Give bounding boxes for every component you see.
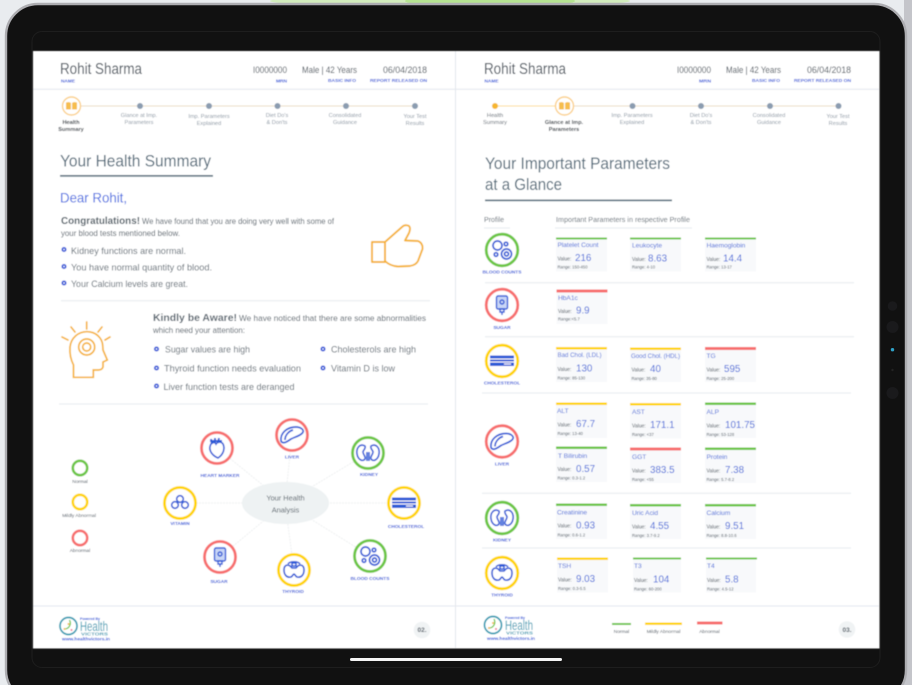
page number 03 (839, 621, 855, 638)
right page header: MRN (699, 78, 712, 84)
logo: health victors: Health (505, 618, 533, 633)
left page progress stepper: Imp. Parameters (188, 114, 230, 120)
table column headers: Profile (484, 217, 504, 224)
profile icon: thyroid (486, 557, 518, 598)
card: bad cholesterol: Value: (558, 367, 571, 373)
right page header: 06/04/2018 (807, 65, 851, 75)
card: alp: Range: 53-128 (706, 432, 735, 437)
card: ggt (630, 448, 681, 483)
card: platelet count (556, 238, 607, 272)
card: t bilirubin: 0.57 (576, 464, 595, 475)
profile icon: cholesterol (484, 345, 520, 386)
right page progress stepper: Health (487, 113, 503, 119)
row: sugar (486, 289, 608, 331)
card: good cholesterol: Range: 35-80 (632, 376, 658, 381)
card: leukocyte: Range: 4-10 (632, 264, 656, 270)
status legend: Abnormal (70, 548, 90, 554)
card: t bilirubin: Range: 0.3-1.2 (558, 476, 586, 480)
card: tg (705, 347, 756, 382)
card: hba1c: Value: (558, 309, 572, 315)
card: hba1c: Range:<5.7 (558, 316, 580, 322)
table column headers: Important Parameters in respective Profile (556, 217, 690, 224)
card: t bilirubin: T Bilirubin (558, 453, 588, 460)
left page header: BASIC INFO (328, 78, 356, 83)
kindly be aware text block (152, 313, 426, 392)
node: heart marker (201, 432, 240, 479)
left page progress stepper: Consolidated (329, 113, 361, 119)
heading: your important parameters at a glance (485, 154, 672, 201)
right page progress stepper: Guidance (757, 120, 781, 126)
left page header: 06/04/2018 (383, 65, 427, 75)
left page header (33, 61, 455, 89)
row: liver (486, 402, 756, 483)
left page progress stepper: Parameters (125, 120, 154, 126)
card: calcium: Value: (706, 524, 720, 530)
card: creatinine (556, 504, 607, 539)
card: platelet count: Platelet Count (558, 242, 599, 249)
congratulations text block: You have normal quantity of blood. (71, 262, 212, 272)
card: protein: 7.38 (725, 465, 745, 476)
card: leukocyte: Value: (632, 257, 646, 263)
status legend (62, 461, 96, 554)
right page progress stepper: Diet Do's (690, 113, 712, 119)
panel: left page health summary (33, 61, 455, 642)
card: good cholesterol: 40 (650, 364, 661, 375)
logo: health victors: Powered By (80, 617, 101, 621)
tablet camera and sensors (886, 301, 898, 399)
card: alp: 101.75 (725, 420, 756, 431)
card: ggt: Value: (632, 468, 646, 474)
card: uric acid: Range: 3.7-9.2 (632, 533, 660, 538)
card: leukocyte: 8.63 (648, 254, 668, 264)
card: uric acid: 4.55 (650, 521, 670, 532)
card: calcium: Range: 8.8-10.6 (706, 533, 737, 538)
card: creatinine: Value: (558, 524, 571, 530)
node: kidney: KIDNEY (360, 472, 379, 478)
logo: health victors: www.healthvictors.in (486, 636, 535, 641)
card: calcium (705, 504, 756, 539)
card: good cholesterol: Value: (632, 368, 645, 374)
card: t4: Range: 4.5-12 (707, 586, 734, 592)
card: good cholesterol (630, 348, 681, 382)
card: ast: Value: (632, 424, 646, 430)
card: protein (705, 448, 756, 483)
left page progress stepper: Your Test (403, 114, 427, 120)
top green glow behind tablet (270, 0, 630, 7)
card: t3: Value: (634, 578, 648, 584)
left page header: MRN (276, 78, 288, 84)
page number 03: 03. (842, 627, 852, 634)
card: ggt: 383.5 (650, 465, 675, 476)
right page progress stepper: Summary (483, 120, 507, 126)
card color legend: Normal (614, 629, 629, 635)
card: hba1c: HbA1c (558, 295, 578, 302)
card: leukocyte: Leukocyte (632, 242, 662, 250)
card: alt (556, 402, 607, 438)
kindly be aware text block: Thyroid function needs evaluation (164, 362, 301, 374)
logo: health victors: Health (80, 619, 108, 634)
center node (242, 482, 329, 524)
right page footer (456, 606, 879, 641)
card: tg: 595 (724, 364, 741, 375)
logo: health victors: Powered By (505, 616, 526, 620)
card: protein: Protein (706, 454, 728, 461)
node: thyroid: THYROID (282, 589, 304, 595)
card: t3: T3 (634, 563, 642, 570)
card: tsh: TSH (558, 563, 571, 570)
logo: health victors: VICTORS (506, 630, 533, 636)
left page progress stepper: Glance at Imp. (121, 113, 158, 119)
card: t3 (633, 558, 681, 592)
node: sugar (204, 542, 236, 585)
left page progress stepper: Health (62, 120, 80, 126)
congratulations text block: Congratulations! (61, 215, 140, 227)
left page progress stepper: Summary (58, 127, 85, 133)
profile icon: cholesterol: CHOLESTEROL (484, 380, 520, 386)
card: alt: 67.7 (576, 419, 595, 430)
card: bad cholesterol: Bad Chol. (LDL) (558, 352, 602, 359)
profile icon: blood counts (483, 234, 522, 276)
card: tsh: Value: (558, 578, 572, 584)
profile icon: thyroid: THYROID (491, 592, 513, 598)
congratulations text block: Kidney functions are normal. (71, 245, 186, 256)
card: t4: Value: (707, 578, 721, 584)
card: creatinine: 0.93 (576, 520, 596, 532)
card: haemoglobin: Range: 13-17 (706, 264, 733, 270)
card: t bilirubin (556, 446, 607, 482)
logo: health victors: VICTORS (81, 632, 108, 636)
left page header: NAME (61, 78, 75, 84)
left page progress stepper: Results (406, 121, 425, 127)
card: uric acid (630, 504, 681, 539)
congratulations text block (61, 215, 335, 289)
card: tg: TG (706, 353, 716, 360)
left page progress stepper: Diet Do's (266, 113, 288, 119)
card: bad cholesterol (556, 347, 607, 382)
heading: your important parameters at a glance: Your Important Parameters (485, 154, 670, 173)
icon: head with idea rays (62, 322, 110, 377)
kindly be aware text block: Sugar values are high (165, 344, 250, 354)
right page progress stepper: Parameters (549, 127, 579, 133)
node: thyroid (278, 554, 310, 595)
card: uric acid: Uric Acid (632, 510, 658, 517)
greeting: Dear Rohit, (60, 190, 127, 206)
card: tsh: 9.03 (576, 574, 596, 585)
card: uric acid: Value: (632, 524, 646, 530)
card: calcium: Calcium (706, 510, 731, 517)
right page progress stepper: Explained (620, 120, 644, 126)
card: leukocyte (630, 238, 681, 272)
card: hba1c (556, 290, 608, 324)
left page progress stepper: & Don'ts (267, 120, 288, 126)
card: t3: 104 (653, 574, 670, 586)
table column headers (484, 217, 692, 228)
left page progress stepper: Explained (197, 121, 221, 127)
card color legend: Abnormal (699, 629, 720, 635)
right page header: I0000000 (677, 65, 711, 75)
center node: Your Health (266, 494, 305, 502)
card: t3: Range: 60-200 (634, 586, 662, 592)
profile icon: liver: LIVER (495, 462, 510, 468)
profile icon: sugar: SUGAR (493, 325, 511, 331)
left page footer (33, 606, 455, 642)
radial diagram: health analysis (164, 420, 424, 595)
page number 02 (414, 622, 430, 638)
card: alp: Value: (706, 424, 720, 430)
card: calcium: 9.51 (725, 521, 744, 532)
profile icon: blood counts: BLOOD COUNTS (483, 270, 522, 276)
card: platelet count: Range: 150-450 (558, 264, 588, 270)
right page progress stepper: Consolidated (753, 113, 785, 119)
heading: your health summary: Your Health Summary (60, 152, 211, 170)
kindly be aware text block: which need your attention: (152, 325, 245, 335)
card: t4: T4 (707, 563, 715, 570)
status legend: Normal (72, 479, 88, 485)
right page header: NAME (484, 78, 498, 84)
card: ast: 171.1 (650, 420, 675, 431)
card: platelet count: 216 (575, 253, 592, 264)
logo: health victors (60, 617, 110, 642)
right page header: REPORT RELEASED ON (794, 78, 852, 83)
card: t4: 5.8 (725, 574, 739, 586)
card color legend: Mildly Abnormal (647, 629, 680, 635)
status legend: Mildly Abnormal (62, 513, 96, 519)
left page header: Rohit Sharma (60, 61, 142, 78)
left page header: I0000000 (253, 65, 287, 75)
card: t bilirubin: Value: (558, 467, 571, 473)
right page header (456, 61, 879, 89)
right page progress stepper: Glance at Imp. (545, 120, 584, 126)
kindly be aware text block: Cholesterols are high (331, 344, 416, 354)
card: tsh (557, 558, 608, 592)
card: alt: Value: (558, 422, 571, 428)
right page progress stepper: Your Test (826, 114, 850, 120)
card: ast: AST (632, 409, 645, 416)
card: ggt: GGT (632, 454, 646, 461)
kindly be aware text block: Liver function tests are deranged (164, 381, 294, 392)
card: haemoglobin (705, 238, 756, 272)
card color legend (612, 622, 722, 635)
kindly be aware text block: We have noticed that there are some abnormalities (239, 313, 426, 323)
logo: health victors (484, 616, 535, 641)
row: kidney (486, 502, 756, 544)
node: blood counts: BLOOD COUNTS (351, 576, 390, 582)
node: vitamin: VITAMIN (170, 521, 190, 527)
card: haemoglobin: Value: (706, 257, 720, 263)
card: alt: Range: 13-40 (558, 431, 584, 436)
node: liver: LIVER (285, 454, 300, 460)
card: ast: Range: <37 (632, 432, 654, 437)
left page header: Male | 42 Years (302, 65, 357, 75)
profile icon: kidney: KIDNEY (493, 538, 512, 544)
right page progress stepper: Imp. Parameters (611, 113, 653, 119)
card: hba1c: 9.9 (576, 306, 590, 316)
profile icon: liver (486, 426, 518, 468)
icon: thumbs up (372, 225, 423, 266)
card: ggt: Range: <55 (632, 477, 654, 482)
card: tg: Value: (706, 368, 720, 374)
row: cholesterol (484, 345, 756, 386)
logo: health victors: www.healthvictors.in (61, 636, 110, 642)
profile icon: kidney (486, 502, 518, 544)
node: cholesterol: CHOLESTEROL (388, 524, 424, 530)
right page progress stepper: & Don'ts (691, 120, 712, 126)
right page progress stepper (483, 97, 850, 133)
left page progress stepper: Guidance (333, 120, 357, 126)
heading: your important parameters at a glance: at a Glance (485, 175, 562, 194)
card: good cholesterol: Good Chol. (HDL) (631, 353, 680, 360)
card: alt: ALT (557, 408, 569, 415)
node: liver (276, 420, 308, 460)
right page header: BASIC INFO (752, 78, 780, 83)
center node: Analysis (272, 506, 300, 514)
node: vitamin (164, 488, 196, 527)
card: haemoglobin: Haemoglobin (706, 242, 746, 250)
congratulations text block: We have found that you are doing very well with some of (142, 216, 335, 226)
home indicator bar (350, 658, 562, 661)
row: blood counts (483, 234, 756, 276)
panel: right page important parameters (456, 61, 879, 641)
card: protein: Range: 5.7-8.2 (706, 477, 735, 482)
card: tsh: Range: 0.3-5.5 (558, 586, 586, 591)
row: thyroid (486, 557, 757, 598)
page number 02: 02. (417, 627, 427, 634)
kindly be aware text block: Vitamin D is low (331, 362, 395, 374)
card: bad cholesterol: Range: 85-130 (558, 376, 586, 380)
node: kidney (352, 438, 384, 478)
card: protein: Value: (706, 468, 720, 474)
right page header: Rohit Sharma (484, 61, 566, 78)
card: ast (630, 403, 681, 438)
card: tg: Range: 25-200 (706, 376, 735, 381)
node: blood counts (351, 540, 390, 582)
card: haemoglobin: 14.4 (723, 254, 743, 264)
node: cholesterol (388, 488, 424, 530)
card: bad cholesterol: 130 (576, 364, 593, 374)
left page header: REPORT RELEASED ON (370, 78, 428, 83)
right page progress stepper: Results (829, 121, 848, 127)
node: sugar: SUGAR (210, 579, 228, 585)
node: heart marker: HEART MARKER (201, 473, 240, 479)
card: creatinine: Creatinine (557, 510, 587, 516)
card: platelet count: Value: (558, 256, 571, 262)
congratulations text block: Your Calcium levels are great. (71, 278, 188, 289)
right page header: Male | 42 Years (726, 65, 781, 75)
kindly be aware text block: Kindly be Aware! (153, 313, 237, 324)
card: creatinine: Range: 0.6-1.2 (558, 532, 586, 538)
card: t4 (706, 558, 757, 592)
left page progress stepper (58, 97, 427, 133)
card: alp: ALP (706, 409, 720, 416)
congratulations text block: your blood tests mentioned below. (61, 228, 180, 238)
card: alp (705, 402, 756, 438)
